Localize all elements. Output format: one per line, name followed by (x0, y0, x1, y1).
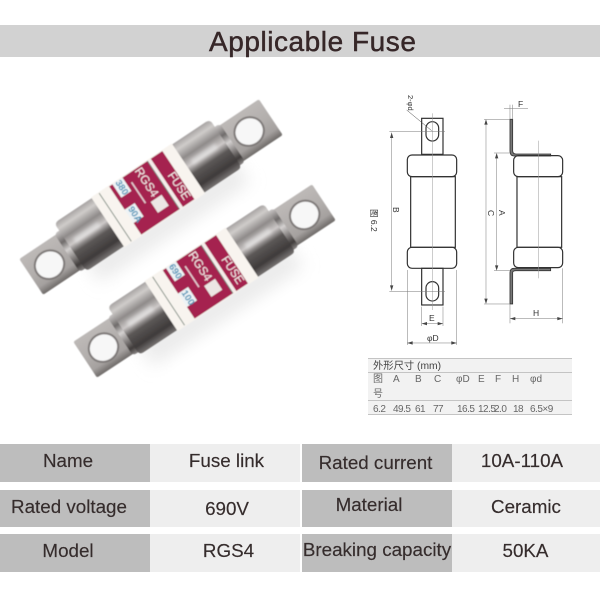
table values: 16.5 (457, 404, 475, 415)
fuse 2 red label: RGS4 (185, 249, 215, 284)
fuse 2 red label: 690 (166, 262, 184, 281)
spec: material: Material (336, 494, 402, 515)
spec: rated current: Rated current (319, 452, 432, 473)
spec: material value (452, 490, 600, 527)
spec: name: Name (43, 450, 93, 471)
spec: rated current value: 10A-110A (481, 450, 563, 471)
drawing labels: E (429, 313, 435, 323)
table column headers: C (434, 374, 441, 385)
table values: 49.5 (393, 404, 411, 415)
table column headers: H (512, 374, 519, 385)
fuse 1 ceramic body (91, 143, 205, 247)
fuse 1 (upper) (13, 90, 294, 312)
fuse 1 left terminal (19, 231, 85, 295)
spec: model value (150, 534, 300, 572)
fuse 2 end caps (108, 204, 296, 355)
table values: 6.2 (373, 404, 386, 415)
table values: 77 (433, 404, 444, 415)
spec: model (0, 534, 150, 572)
fuse 1 red label (109, 151, 195, 235)
spec: name (0, 444, 150, 482)
spec: breaking capacity (302, 534, 452, 572)
table column headers: 图 (373, 373, 383, 385)
table column headers: φd (530, 374, 542, 385)
front view dimension lines (389, 110, 457, 345)
table column headers: E (478, 374, 485, 385)
fuse 1 red label: 380 (112, 178, 130, 197)
spec: rated current (302, 444, 452, 482)
title: Applicable Fuse (209, 26, 416, 57)
fuse 2 (lower) (67, 175, 347, 395)
table values: 61 (415, 404, 426, 415)
fuse 2 left terminal (73, 314, 139, 378)
drawing labels: 2-φd (406, 95, 415, 111)
fuse 2 red label: FUSE (218, 254, 245, 287)
drawing labels (369, 95, 539, 343)
fuse 2 ceramic body (145, 228, 259, 331)
side view of fuse (510, 119, 563, 304)
drawing labels: φD (427, 333, 439, 343)
fuse 1 red label: 90A (125, 204, 144, 225)
table column headers (373, 373, 542, 400)
spec: breaking capacity value: 50KA (503, 540, 548, 561)
table values (373, 404, 554, 415)
drawing labels: 图 6.2 (369, 209, 379, 232)
table column headers: B (415, 374, 422, 385)
table values: 2.0 (494, 404, 507, 415)
drawing labels: F (518, 99, 523, 109)
fuse 1 right terminal (216, 99, 283, 164)
spec: rated voltage: Rated voltage (11, 496, 127, 517)
table column headers: A (393, 374, 400, 385)
spec: name value: Fuse link (189, 450, 264, 471)
table heading: 外形尺寸 (mm) (373, 359, 441, 372)
drawing labels: B (391, 207, 401, 213)
spec: model: Model (42, 540, 94, 561)
spec: rated current value (452, 444, 600, 482)
table values: 12.5 (478, 404, 496, 415)
table column headers: φD (456, 374, 470, 385)
spec: material value: Ceramic (491, 496, 561, 517)
table column headers: 号 (373, 388, 383, 400)
spec: rated voltage value: 690V (205, 498, 249, 519)
table column headers: F (495, 374, 501, 385)
fuse 1 end caps (54, 119, 242, 271)
table values: 6.5×9 (530, 404, 554, 415)
side view dimension lines (484, 105, 563, 323)
spec: rated voltage (0, 490, 150, 527)
title (0, 25, 600, 57)
spec: breaking capacity: Breaking capacity (303, 539, 451, 560)
fuse 1 red label: RGS4 (132, 165, 162, 200)
table values: 18 (513, 404, 524, 415)
spec: rated voltage value (150, 490, 300, 527)
drawing labels: H (533, 308, 539, 318)
fuse 2 red label (163, 235, 248, 319)
fuse 2 right terminal (269, 184, 336, 248)
fuse 1 red label: FUSE (165, 170, 192, 203)
spec table (0, 444, 600, 572)
drawing labels: C (486, 210, 496, 216)
fuse 2 red label: 100 (179, 288, 197, 308)
spec: material (302, 490, 452, 527)
spec: breaking capacity value (452, 534, 600, 572)
front view of fuse (407, 113, 457, 310)
spec: name value (150, 444, 300, 482)
drawing labels: A (497, 210, 507, 216)
spec: model value: RGS4 (203, 540, 254, 561)
